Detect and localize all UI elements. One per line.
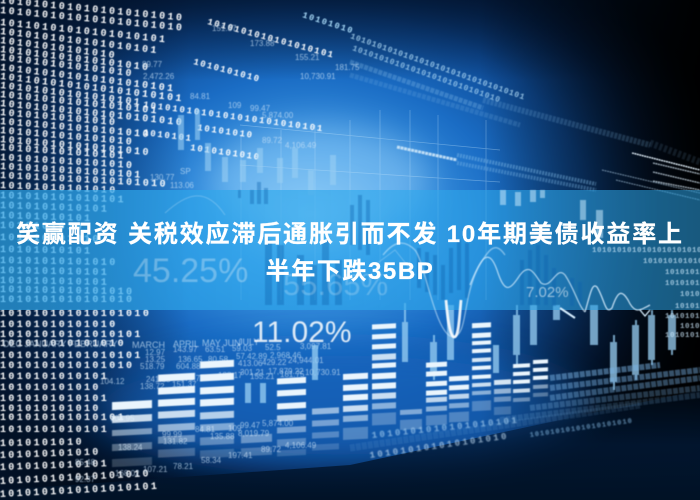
- small market figures: 13.25: [145, 355, 166, 364]
- binary digit wall, left: 101010101010101: [0, 413, 126, 424]
- equalizer: column D: [241, 434, 272, 456]
- distant digit rows, upper right: 101010101010101010101010101010101: [349, 32, 526, 103]
- small market figures: 138.24: [118, 443, 143, 452]
- horizontal translucent title band: [0, 190, 700, 310]
- small market figures: 109: [228, 424, 242, 433]
- small market figures: 57.42.89: [236, 352, 268, 361]
- small market figures: JULY: [238, 337, 259, 347]
- small market figures: 151.37: [172, 380, 197, 389]
- small market figures: 301.21: [240, 368, 265, 377]
- small market figures: 179.77: [180, 374, 205, 383]
- small market figures: MAY JUN: [202, 338, 241, 348]
- lower right block matrix: [350, 365, 700, 448]
- small market figures: 84.81: [195, 425, 216, 434]
- grid lines: [240, 110, 500, 300]
- small market figures: 155.21: [250, 372, 275, 381]
- small market figures: 181.75: [280, 370, 305, 379]
- equalizer bar columns: [112, 315, 548, 467]
- small market figures: 10,730.91: [300, 72, 336, 81]
- small market figures: 99.99: [162, 430, 183, 439]
- small market figures: 78.21: [173, 462, 194, 471]
- small market figures: 4,106.49: [285, 441, 317, 450]
- small market figures: 99.47: [240, 421, 261, 430]
- small market figures: 413.06: [238, 359, 263, 368]
- binary digit wall, left: 10101010101010: [0, 320, 118, 331]
- small market figures: 5,874.00: [262, 111, 294, 120]
- binary digit wall, left: 101010101010101010: [0, 45, 151, 74]
- long binary rows, upper centre: [143, 17, 335, 163]
- percentage labels: 11.02%: [252, 316, 352, 349]
- small market figures: 130.77: [150, 173, 175, 182]
- binary digit wall, left: 101010101010101: [0, 143, 126, 163]
- small market figures: 131.82: [163, 437, 188, 446]
- candles on band right: [500, 190, 603, 238]
- percentage labels: 7.02%: [526, 284, 569, 301]
- binary digit wall, left: 10101010101: [0, 211, 93, 225]
- small market figures: 113.06: [170, 181, 194, 190]
- small market figures: 92.37: [75, 475, 96, 484]
- small market figures: [3, 24, 360, 484]
- small market figures: 136.65: [178, 355, 203, 364]
- binary digit wall, left: 1010101010101: [0, 201, 109, 216]
- small market figures: 10,730.91: [305, 368, 341, 377]
- binary digit wall, left: 10101010101010101: [0, 351, 143, 362]
- binary digit wall, left: 10101010101010: [0, 108, 118, 129]
- binary digit wall, left: 101010101010: [0, 447, 101, 462]
- small market figures: 197.41: [228, 451, 253, 460]
- right-hand binary rows: [592, 247, 700, 340]
- small market figures: 89.72: [262, 136, 283, 145]
- long binary rows, upper centre: 1010101010101010101010101: [143, 100, 325, 134]
- small market figures: 604.88: [176, 362, 201, 371]
- small market figures: 84.81: [190, 92, 211, 101]
- binary digit wall, left: 1010101010101010: [0, 361, 134, 372]
- equalizer: column C: [200, 360, 234, 459]
- distant digit rows, upper right: 1010101010101010101010101010: [351, 44, 502, 105]
- binary digit wall, left: 1010101010101010101: [0, 90, 159, 118]
- small market figures: 80.58: [208, 355, 229, 364]
- binary digit wall, left: 1010101010101010101010: [0, 6, 185, 35]
- binary digit wall, left: 101010101010101010: [0, 469, 151, 488]
- small market figures: 4,106.49: [285, 141, 317, 150]
- binary digit wall, left: 1010101010: [0, 221, 84, 233]
- small market figures: 104.12: [100, 377, 125, 386]
- small market figures: 5,874.00: [262, 419, 294, 428]
- reflected digit rows, bottom: 10101010101010101010: [529, 418, 633, 440]
- small market figures: 59.03: [232, 344, 253, 353]
- percentage labels: 45.25%: [133, 252, 248, 290]
- binary digit wall, left: 1010101010101010: [0, 285, 135, 298]
- binary digit wall, left: 1010101010101: [0, 459, 109, 474]
- distant digit rows, upper right: [301, 10, 700, 200]
- binary digit wall, left: 10101010101010: [0, 181, 118, 197]
- small market figures: 173.88: [250, 39, 275, 48]
- binary digit wall, left: 1010101010101010: [0, 295, 134, 306]
- small market figures: 241.63: [146, 375, 171, 384]
- small market figures: 155.21: [295, 53, 320, 62]
- binary digit wall, left: 10101010101: [0, 245, 93, 258]
- small market figures: APRIL: [173, 339, 199, 349]
- binary digit wall, left: 1010101010101010: [0, 153, 135, 172]
- equalizer: column G: [343, 373, 368, 440]
- column charts inside band: [238, 182, 582, 306]
- equalizer: column E: [277, 377, 306, 456]
- binary digit wall, left: 1010101010101: [0, 372, 109, 383]
- small market figures: 89.77: [142, 60, 163, 69]
- wave line chart: [165, 196, 650, 337]
- binary digit wall, left: 101010101010101010: [0, 135, 151, 159]
- small market figures: 429.22: [262, 358, 287, 367]
- binary digit wall, left: 101010101010: [0, 404, 101, 415]
- small market figures: 518.79: [140, 362, 165, 371]
- small market figures: 85.48: [75, 458, 96, 467]
- small market figures: 8,019.79: [238, 429, 270, 438]
- binary digit wall, left: 1010101010101010: [0, 53, 134, 80]
- equalizer: column H: [372, 323, 396, 426]
- small market figures: 138.72: [140, 382, 165, 391]
- small market figures: 143.97: [173, 345, 198, 354]
- binary digit wall, left: 101010101010: [0, 233, 101, 246]
- equalizer: column F: [312, 407, 339, 451]
- title: 笑赢配资 关税效应滞后通胀引而不发 10年期美债收益率上: [16, 221, 684, 248]
- binary digit wall, left: 10101010101010101: [0, 162, 143, 182]
- small market figures: 24,944.01: [288, 356, 324, 365]
- small market figures: 181.75: [335, 63, 360, 72]
- equalizer: column B: [158, 373, 195, 458]
- binary digit wall, left: 10101010101010101: [0, 330, 143, 341]
- long binary rows, upper centre: 1010101010101010101: [206, 17, 335, 61]
- binary digit wall, left: 101010101010101010: [0, 117, 151, 141]
- small market figures: 2,968.46: [270, 351, 302, 360]
- binary digit wall, left: 101011010101010: [0, 339, 126, 350]
- binary digit wall, left: 10101010101010101: [0, 81, 143, 109]
- binary digit wall, left: 1011010101010101010101: [0, 72, 184, 105]
- binary digit wall, left: 1010101010101: [0, 394, 109, 405]
- binary digit wall, left: 10101010101010101010: [0, 171, 168, 191]
- small market figures: 99.47: [250, 104, 271, 113]
- long binary rows, upper centre: 10101010: [197, 123, 254, 141]
- small market figures: 107.21: [143, 465, 168, 474]
- equalizer: columns I to O: [400, 319, 548, 430]
- binary digit wall, left: 1010101010101010101: [0, 27, 159, 57]
- binary digit wall, left: 1010101010101010101010: [0, 99, 185, 129]
- small market figures: 63.51: [205, 345, 226, 354]
- percentage labels: 55.65%: [283, 267, 388, 302]
- small market figures: 188.17: [218, 371, 243, 380]
- binary digit wall, left: 101010101010: [0, 383, 101, 394]
- small market figures: 2,472.26: [143, 72, 175, 81]
- reflected digit rows, bottom: [369, 416, 633, 461]
- small market figures: 103.95: [110, 414, 135, 423]
- binary digit wall, left: 101010101010101010: [0, 309, 151, 320]
- distant digit rows, upper right: 10101010: [301, 10, 355, 36]
- binary digit wall, left: 1010101010101: [0, 276, 109, 289]
- small market figures: 58.34: [201, 456, 222, 465]
- binary digit wall, left: 101010101010101010101: [0, 63, 176, 95]
- small market figures: MARCH: [132, 340, 165, 350]
- small market figures: 17,879.22: [268, 367, 304, 376]
- small market figures: 12.97: [145, 348, 166, 357]
- small market figures: 89.72: [261, 445, 282, 454]
- small market figures: 168.02: [115, 469, 140, 478]
- binary digit wall, left: 10101010101010: [0, 36, 118, 62]
- small market figures: 151.37: [212, 24, 237, 33]
- small market figures: 109: [228, 101, 242, 110]
- long binary rows, upper centre: 1010101: [143, 128, 193, 144]
- binary digit wall, left: 101010101010101: [0, 191, 126, 206]
- reflected digit rows, bottom: 1010101010101010101: [371, 416, 520, 441]
- equalizer: column A: [112, 400, 152, 467]
- small market figures: SP: [180, 167, 191, 176]
- title: 半年下跌35BP: [266, 258, 434, 285]
- long binary rows, upper centre: 1010101010: [190, 143, 261, 163]
- small market figures: 135.88: [210, 432, 235, 441]
- binary digit wall, left: 10110101010101010101: [0, 18, 168, 47]
- binary digit wall, left: 1010101010101: [0, 266, 109, 279]
- long binary rows, upper centre: 1010101010: [192, 57, 261, 85]
- binary digit wall, left: 1010101010: [0, 438, 84, 450]
- binary digit wall, left: 1010101010101010: [0, 126, 135, 149]
- small market figures: DEC JANUARY FEBRUARY: [3, 339, 118, 349]
- candlestick chart: [178, 110, 676, 403]
- binary digit wall, left: [0, 0, 185, 500]
- small market figures: 52.5: [265, 343, 281, 352]
- reflected digit rows, bottom: 101010101010101010: [369, 432, 509, 461]
- percentage labels: [133, 252, 569, 349]
- small market figures: 3,097.81: [300, 342, 332, 351]
- binary digit wall, left: 10101010101010: [0, 256, 118, 269]
- binary digit wall, left: 1010101010101: [0, 425, 109, 436]
